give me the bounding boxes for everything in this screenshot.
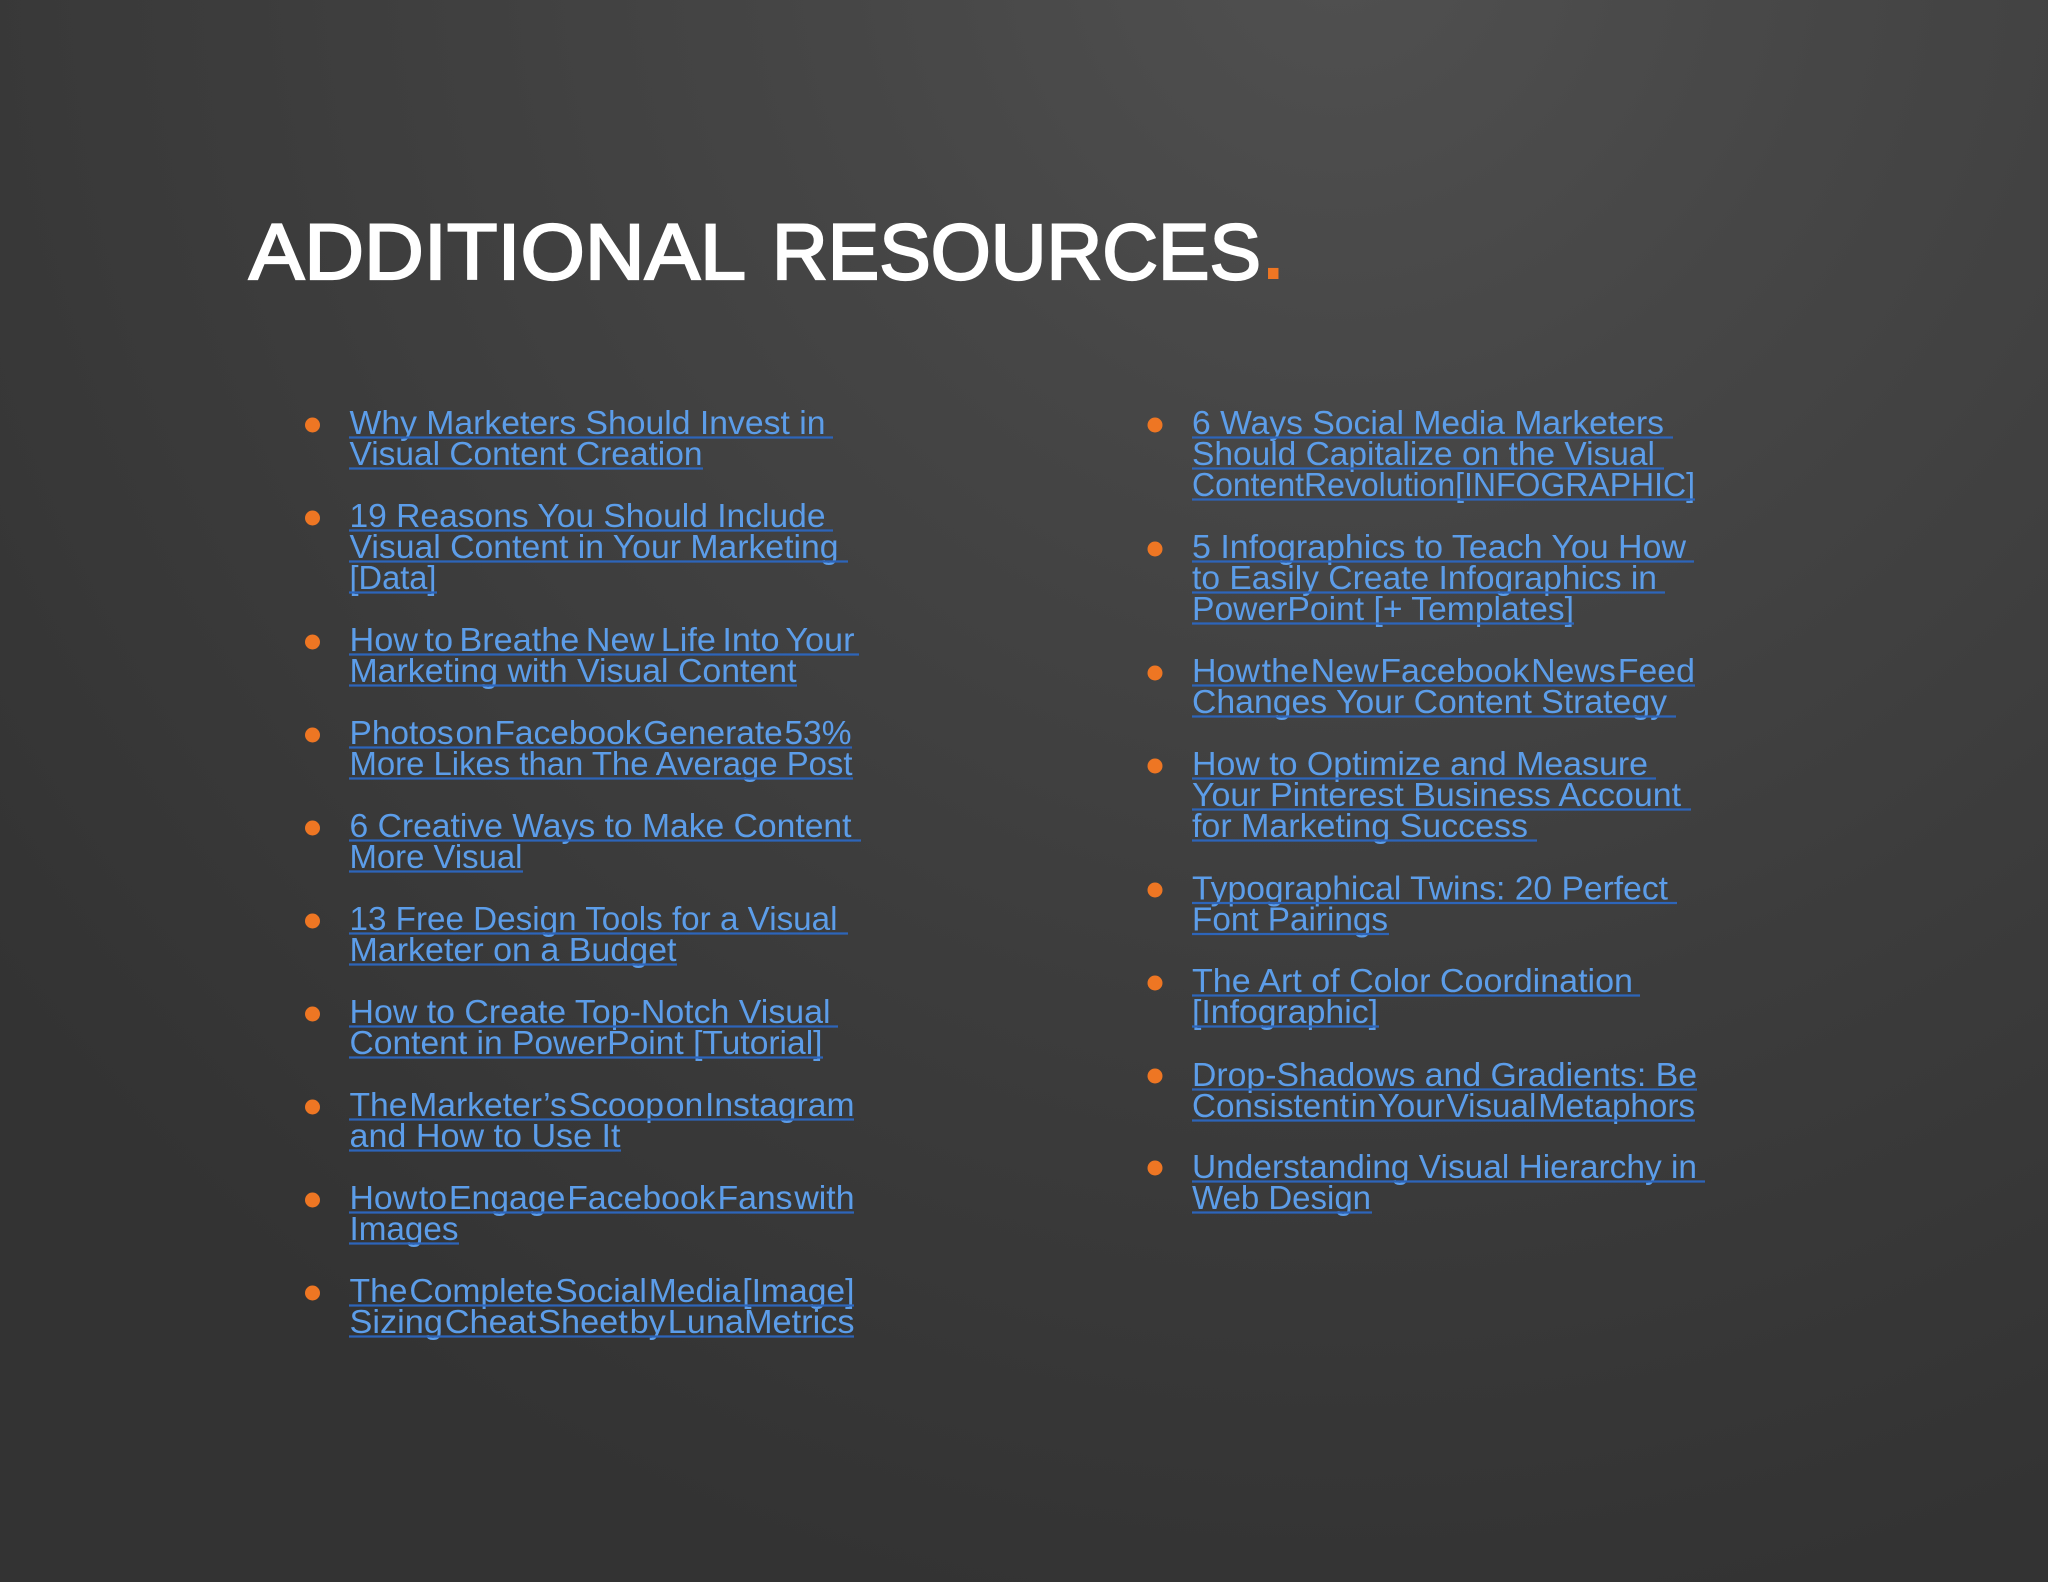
panel: right column of resource links: [1148, 405, 1705, 1217]
link item: 19 Reasons: 19 Reasons You Should Include: [350, 498, 826, 535]
link item: How to Create Top-Notch: Content in PowerPoint [Tutorial]: [350, 1025, 822, 1062]
link item: Photos on Facebook: Photos on Facebook Generate 53%: [350, 715, 852, 752]
link item: How to Engage Facebook Fans: [305, 1180, 854, 1248]
title: RESOURCES: [772, 207, 1261, 296]
link item: Why Marketers Should Invest: Why Marketers Should Invest in: [350, 405, 826, 442]
link item: Photos on Facebook: [305, 715, 853, 783]
link item: 5 Infographics: PowerPoint [+ Templates]: [1192, 591, 1574, 628]
title: ADDITIONAL: [249, 207, 746, 296]
link item: Understanding Visual Hierarchy: [1148, 1149, 1705, 1217]
link item: How to Engage Facebook Fans: Images: [350, 1211, 458, 1248]
link item: Typographical Twins: Font Pairings: [1192, 902, 1388, 939]
link item: 6 Ways Social Media Marketers: Content Revolution [INFOGRAPHIC]: [1192, 467, 1695, 504]
link item: The Marketer's Scoop: [305, 1087, 854, 1155]
link item: 13 Free Design Tools: Marketer on a Budget: [350, 932, 677, 969]
link item: Typographical Twins: Typographical Twins: 20 Perfect: [1192, 871, 1669, 908]
link item: Drop-Shadows and Gradients: Consistent in Your Visual Metaphors: [1192, 1088, 1695, 1125]
link item: 5 Infographics: [1148, 529, 1694, 628]
link item: 6 Creative Ways: [305, 808, 861, 876]
link item: How to Optimize Pinterest: Your Pinterest Business Account: [1192, 777, 1682, 814]
link item: Why Marketers Should Invest: Visual Content Creation: [350, 436, 702, 473]
link item: Typographical Twins: [1148, 871, 1677, 939]
link item: How to Optimize Pinterest: for Marketing Success: [1192, 808, 1528, 845]
link item: 5 Infographics: 5 Infographics to Teach You How: [1192, 529, 1687, 566]
link item: The Complete Social Media: Sizing Cheat Sheet by LunaMetrics: [350, 1304, 854, 1341]
link item: 5 Infographics: to Easily Create Infographics in: [1192, 560, 1657, 597]
link item: How the New Facebook News Feed: How the New Facebook News Feed: [1192, 653, 1695, 690]
link item: 6 Ways Social Media Marketers: 6 Ways Social Media Marketers: [1192, 405, 1664, 442]
link item: How the New Facebook News Feed: Changes Your Content Strategy: [1192, 684, 1667, 721]
link item: The Complete Social Media: [305, 1273, 854, 1341]
link item: Drop-Shadows and Gradients: Drop-Shadows and Gradients: Be: [1192, 1057, 1697, 1094]
link item: 6 Ways Social Media Marketers: [1148, 405, 1695, 504]
link item: 6 Creative Ways: 6 Creative Ways to Make Content: [350, 808, 852, 845]
link item: The Art of Color Coordination: [1148, 963, 1640, 1031]
link item: The Art of Color Coordination: [Infographic]: [1192, 994, 1378, 1031]
title: .: [1263, 212, 1284, 295]
link item: How to Optimize Pinterest: How to Optimize and Measure: [1192, 746, 1648, 783]
link item: How to Create Top-Notch: How to Create Top-Notch Visual: [350, 994, 830, 1031]
link item: 13 Free Design Tools: [305, 901, 848, 969]
link item: Photos on Facebook: More Likes than The Average Post: [350, 746, 853, 783]
link item: Drop-Shadows and Gradients: [1148, 1057, 1697, 1125]
link item: The Marketer's Scoop: The Marketer’s Scoop on Instagram: [350, 1087, 854, 1124]
link item: The Art of Color Coordination: The Art of Color Coordination: [1192, 963, 1633, 1000]
link item: How to Breathe New Life: Marketing with Visual Content: [350, 653, 797, 690]
link item: The Complete Social Media: The Complete Social Media [Image]: [350, 1273, 854, 1310]
link item: Understanding Visual Hierarchy: Web Design: [1192, 1180, 1371, 1217]
link item: 6 Ways Social Media Marketers: Should Capitalize on the Visual: [1192, 436, 1655, 473]
link item: How to Create Top-Notch: [305, 994, 838, 1062]
link item: How to Engage Facebook Fans: How to Engage Facebook Fans with: [350, 1180, 854, 1217]
link item: 6 Creative Ways: More Visual: [350, 839, 522, 876]
link item: How to Breathe New Life: How to Breathe New Life Into Your: [350, 622, 854, 659]
link item: How to Breathe New Life: [305, 622, 859, 690]
link item: How to Optimize Pinterest: [1148, 746, 1691, 845]
link item: 19 Reasons: [Data]: [350, 560, 436, 597]
link item: The Marketer's Scoop: and How to Use It: [350, 1118, 621, 1155]
link item: 19 Reasons: [305, 498, 848, 597]
link item: Understanding Visual Hierarchy: Understanding Visual Hierarchy in: [1192, 1149, 1697, 1186]
link item: 19 Reasons: Visual Content in Your Marketing: [350, 529, 838, 566]
panel: left column of resource links: [305, 405, 861, 1341]
title: [249, 207, 1284, 296]
link item: How the New Facebook News Feed: [1148, 653, 1695, 721]
link item: 13 Free Design Tools: 13 Free Design Tools for a Visual: [350, 901, 838, 938]
link item: Why Marketers Should Invest: [305, 405, 833, 473]
